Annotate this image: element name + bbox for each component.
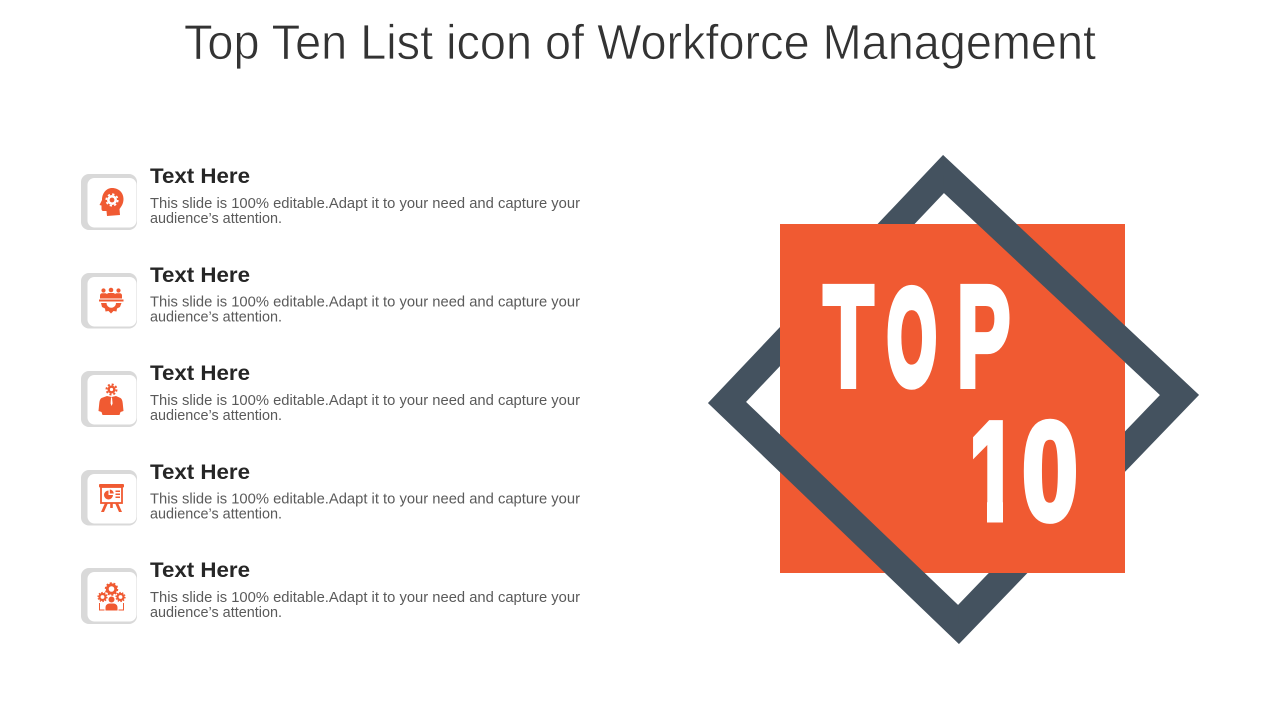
orange square <box>780 224 1125 573</box>
diamond overlapping bands <box>708 155 1199 644</box>
heading 3: Text Here <box>150 362 250 385</box>
diamond frame <box>708 155 1199 644</box>
icon card 4 <box>81 470 137 526</box>
description 1: This slide is 100% editable.Adapt it to your need and capture your <box>150 196 580 212</box>
list item 2 <box>81 264 580 328</box>
list item 1 <box>81 165 580 230</box>
description 2: audience’s attention. <box>150 310 282 326</box>
icon: head with gear <box>100 188 124 216</box>
list item 5 <box>81 559 580 624</box>
icon: manager with gear <box>98 384 124 415</box>
description 2: This slide is 100% editable.Adapt it to your need and capture your <box>150 294 580 310</box>
description 4: This slide is 100% editable.Adapt it to your need and capture your <box>150 492 580 508</box>
heading 1: Text Here <box>150 165 250 188</box>
description 4: audience’s attention. <box>150 506 282 522</box>
title: Top Ten List icon of Workforce Management <box>184 16 1096 70</box>
10 label: 1 <box>969 392 1017 550</box>
icon: presentation board <box>99 484 124 512</box>
icon: person with three gears <box>98 583 125 610</box>
heading 2: Text Here <box>150 264 250 287</box>
list item 4 <box>81 461 580 526</box>
heading 5: Text Here <box>150 559 250 582</box>
icon card 3 <box>81 371 137 427</box>
icon: team above gear <box>99 288 124 314</box>
TOP label: P <box>957 256 1011 417</box>
TOP label: T <box>823 256 874 417</box>
TOP label <box>823 256 1011 417</box>
description 5: audience’s attention. <box>150 605 282 621</box>
description 3: audience’s attention. <box>150 408 282 424</box>
10 label <box>960 392 1078 550</box>
icon card 2 <box>81 273 137 328</box>
list item 3 <box>81 362 580 427</box>
icon card 1 <box>81 174 137 230</box>
top 10 badge <box>708 155 1199 644</box>
10 label: 0 <box>1022 392 1078 550</box>
TOP label: O <box>887 264 936 412</box>
description 1: audience’s attention. <box>150 211 282 227</box>
description 5: This slide is 100% editable.Adapt it to your need and capture your <box>150 590 580 606</box>
heading 4: Text Here <box>150 461 250 484</box>
description 3: This slide is 100% editable.Adapt it to your need and capture your <box>150 393 580 409</box>
icon card 5 <box>81 568 137 624</box>
